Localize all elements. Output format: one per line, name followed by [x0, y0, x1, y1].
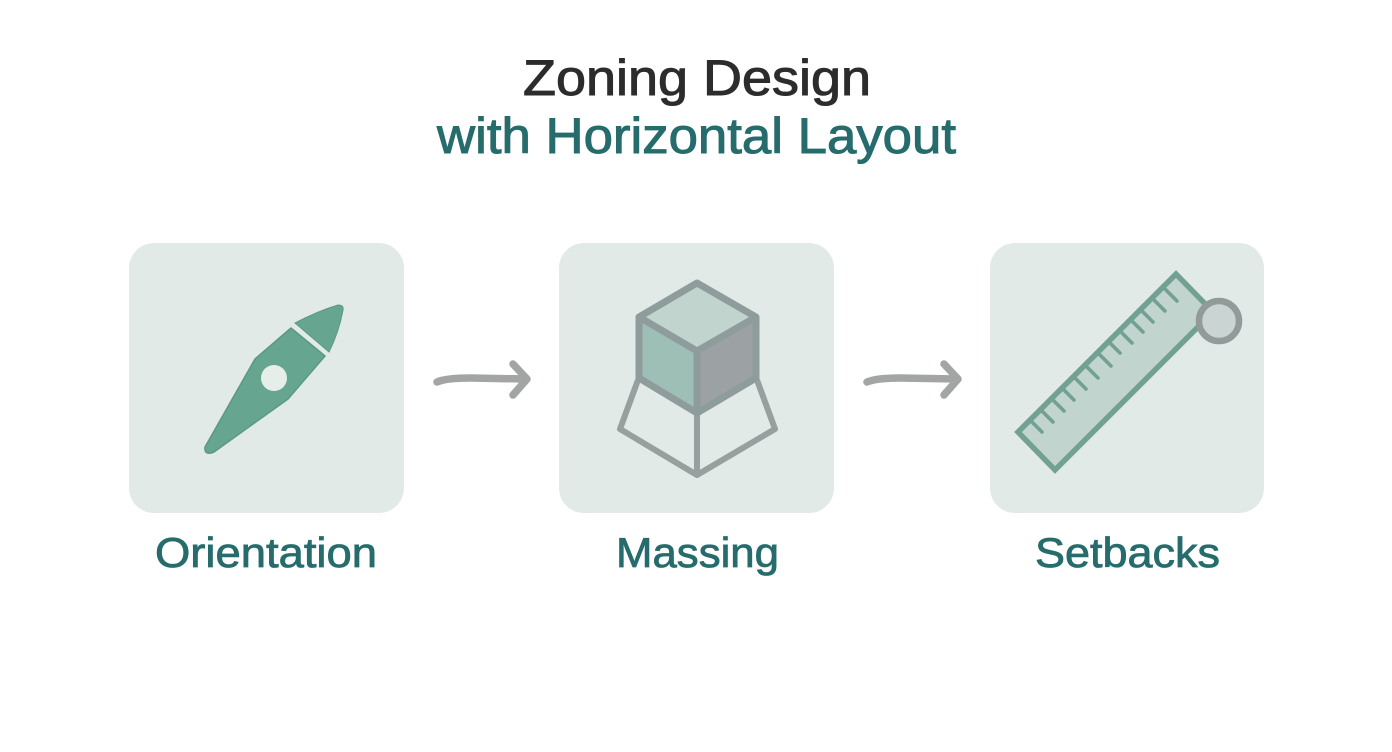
icon: compass needle — [205, 305, 343, 453]
panel background: massing — [559, 243, 834, 513]
icon: ruler — [1018, 274, 1239, 470]
label: setbacks: Setbacks — [1035, 529, 1220, 576]
panel background: orientation — [129, 243, 404, 513]
title: second line: with Horizontal Layout — [436, 108, 956, 164]
panel: orientation — [129, 243, 404, 576]
title: first line: Zoning Design — [523, 50, 871, 106]
panel background: setbacks — [990, 243, 1264, 513]
icon: massing cube — [620, 283, 775, 475]
label: orientation: Orientation — [155, 529, 377, 576]
panel: massing — [559, 243, 834, 576]
label: massing: Massing — [616, 529, 779, 576]
arrow: orientation to massing — [437, 364, 527, 395]
panel: setbacks — [990, 243, 1264, 576]
arrow: massing to setbacks — [867, 364, 958, 395]
